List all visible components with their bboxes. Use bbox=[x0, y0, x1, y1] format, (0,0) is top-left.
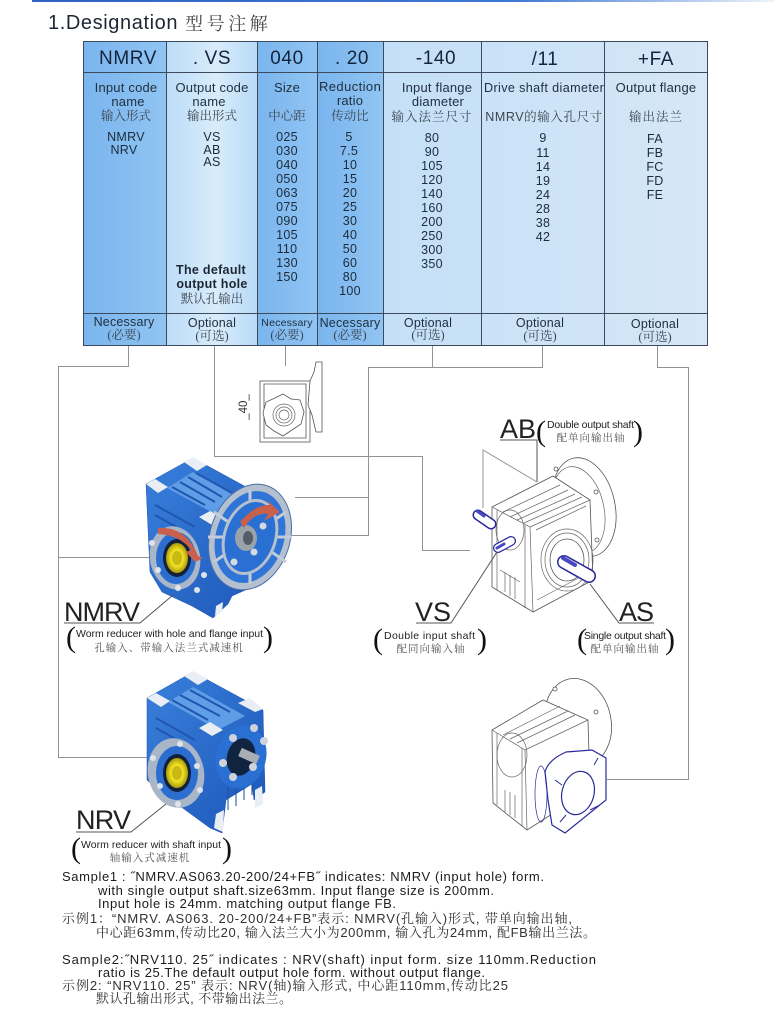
column: reduction ratio bbox=[319, 79, 381, 298]
column: size: 中心距 bbox=[268, 108, 306, 123]
sample 2 text: Sample2:˝NRV110. 25˝ indicates : NRV(shaft) input form. size 110mm.Reduction bbox=[62, 952, 596, 967]
AS label: 配单向输出轴 bbox=[590, 642, 660, 655]
header codes: +FA bbox=[638, 49, 674, 70]
column: input flange: 350 bbox=[421, 257, 443, 271]
column: drive shaft: 42 bbox=[536, 230, 550, 244]
column: output code: output hole bbox=[176, 277, 248, 291]
AB label bbox=[483, 414, 643, 508]
sample 2 text bbox=[62, 952, 596, 1006]
NMRV label: ) bbox=[263, 621, 273, 654]
column: output code: VS bbox=[203, 130, 221, 144]
header codes: NMRV bbox=[99, 48, 157, 69]
column: size: 050 bbox=[276, 172, 298, 186]
column: size: 030 bbox=[276, 144, 298, 158]
column: input flange bbox=[391, 80, 473, 271]
column: input flange: 250 bbox=[421, 229, 443, 243]
column: size: 130 bbox=[276, 256, 298, 270]
column: drive shaft: NMRV的输入孔尺寸 bbox=[485, 109, 603, 124]
column: output code: The default bbox=[176, 263, 247, 277]
column: output flange: FB bbox=[647, 146, 663, 160]
column: input flange: 200 bbox=[421, 215, 443, 229]
column: reduction ratio: 60 bbox=[343, 256, 357, 270]
column: size: 075 bbox=[276, 200, 298, 214]
AS label: ) bbox=[665, 623, 675, 656]
column: reduction ratio: 10 bbox=[343, 158, 357, 172]
red arrow left bbox=[158, 528, 203, 562]
title bbox=[48, 12, 271, 34]
AB label: ( bbox=[536, 415, 546, 448]
column: input code bbox=[95, 80, 157, 157]
column: output flange: Output flange bbox=[616, 80, 696, 95]
column: output flange bbox=[616, 80, 696, 202]
column: input flange: 120 bbox=[421, 173, 443, 187]
VS label bbox=[373, 552, 497, 656]
footer row: Optional bbox=[404, 316, 452, 330]
column: drive shaft: 38 bbox=[536, 216, 550, 230]
output flange FA bbox=[545, 750, 606, 833]
AS label: Single output shaft bbox=[584, 630, 666, 642]
column: output code: AS bbox=[203, 155, 221, 169]
column: input code: 输入形式 bbox=[101, 108, 151, 123]
column: drive shaft: 24 bbox=[536, 188, 550, 202]
mounting pads bbox=[147, 671, 263, 832]
NRV blue gearbox bbox=[141, 671, 273, 833]
NRV label: ) bbox=[222, 832, 232, 865]
footer row: (可选) bbox=[523, 328, 557, 343]
column: reduction ratio: 80 bbox=[343, 270, 357, 284]
column: output code: 默认孔输出 bbox=[181, 291, 243, 306]
footer row: (可选) bbox=[411, 327, 445, 342]
sample 1 text: 中心距63mm,传动比20, 输入法兰大小为200mm, 输入孔为24mm, 配FB输出兰法。 bbox=[96, 925, 596, 940]
header codes: 040 bbox=[270, 48, 304, 69]
column: input flange: 160 bbox=[421, 201, 443, 215]
column: drive shaft bbox=[484, 81, 604, 244]
AS label: ( bbox=[577, 623, 587, 656]
connector lines bbox=[58, 346, 688, 780]
column: input code: name bbox=[111, 94, 145, 109]
title: 1.Designation bbox=[48, 12, 178, 34]
NRV label bbox=[71, 804, 232, 865]
AS label bbox=[577, 584, 675, 656]
column: output code: 输出形式 bbox=[187, 108, 237, 123]
column: reduction ratio: 40 bbox=[343, 228, 357, 242]
AB label: ) bbox=[633, 415, 643, 448]
sample 1 text: Sample1 : ˝NMRV.AS063.20-200/24+FB˝ indicates: NMRV (input hole) form. bbox=[62, 869, 544, 884]
column: size: 025 bbox=[276, 130, 298, 144]
footer row: Optional bbox=[631, 317, 679, 331]
VS label: ) bbox=[477, 623, 487, 656]
VS label: VS bbox=[415, 597, 451, 627]
column: reduction ratio: ratio bbox=[337, 93, 363, 108]
AB label: Double output shaft bbox=[547, 419, 634, 431]
output shaft face bbox=[209, 720, 273, 794]
column: input code: NRV bbox=[110, 143, 138, 157]
footer row: (必要) bbox=[270, 328, 304, 342]
NMRV label: Worm reducer with hole and flange input bbox=[76, 628, 263, 640]
footer row: Optional bbox=[516, 316, 564, 330]
footer row: Optional bbox=[188, 316, 236, 330]
NRV label: Worm reducer with shaft input bbox=[81, 839, 221, 851]
sample 1 text: with single output shaft.size63mm. Input flange size is 200mm. bbox=[97, 883, 494, 898]
column: size bbox=[268, 80, 306, 284]
footer row: (必要) bbox=[333, 328, 367, 342]
red arrow right bbox=[240, 500, 280, 528]
column: output flange: 输出法兰 bbox=[629, 109, 683, 124]
output flange line-art gearbox bbox=[492, 672, 619, 833]
column: reduction ratio: 50 bbox=[343, 242, 357, 256]
column: input flange: 140 bbox=[421, 187, 443, 201]
input face bbox=[144, 522, 206, 594]
footer row: (可选) bbox=[195, 328, 229, 343]
footer row bbox=[94, 315, 679, 344]
sample 1 text: Input hole is 24mm. matching output flange FB. bbox=[98, 896, 396, 911]
AS label: AS bbox=[619, 597, 654, 627]
column: reduction ratio: 5 bbox=[345, 130, 353, 144]
header codes: . 20 bbox=[335, 48, 369, 69]
column: output code: name bbox=[192, 94, 226, 109]
header codes: -140 bbox=[416, 48, 456, 69]
column: size: 090 bbox=[276, 214, 298, 228]
NRV label: 轴输入式减速机 bbox=[110, 851, 190, 864]
column: reduction ratio: 100 bbox=[339, 284, 361, 298]
AB label: AB bbox=[500, 414, 536, 444]
size 40 outline drawing bbox=[238, 362, 322, 442]
title: 型号注解 bbox=[185, 14, 271, 34]
column: reduction ratio: 30 bbox=[343, 214, 357, 228]
column: drive shaft: 28 bbox=[536, 202, 550, 216]
VS input shaft bbox=[498, 541, 511, 548]
column: drive shaft: 11 bbox=[536, 146, 550, 160]
column: size: 150 bbox=[276, 270, 298, 284]
mounting pads bbox=[146, 457, 250, 616]
column: drive shaft: Drive shaft diameter bbox=[484, 81, 604, 95]
column: input code: Input code bbox=[95, 80, 157, 95]
sample 1 text: 示例1：“NMRV. AS063. 20-200/24+FB”表示: NMRV(孔输入)形式, 带单向输出轴, bbox=[62, 911, 572, 926]
designation table bbox=[83, 41, 708, 346]
column: input flange: 90 bbox=[425, 145, 439, 159]
VS label: Double input shaft bbox=[384, 630, 475, 642]
column: input flange: 300 bbox=[421, 243, 443, 257]
NMRV label bbox=[64, 595, 273, 654]
VS label: ( bbox=[373, 623, 383, 656]
sample 2 text: ratio is 25.The default output hole form. without output flange. bbox=[98, 965, 485, 980]
NRV label: NRV bbox=[76, 805, 131, 835]
size 40 outline drawing: _40_ bbox=[238, 394, 250, 421]
column: size: Size bbox=[274, 80, 300, 95]
column: size: 110 bbox=[277, 242, 297, 256]
column: reduction ratio: 15 bbox=[343, 172, 357, 186]
rear shaft bbox=[478, 515, 491, 524]
column: output flange: FA bbox=[647, 132, 663, 146]
header codes: /11 bbox=[532, 49, 558, 70]
column: output code bbox=[175, 80, 249, 306]
column: size: 040 bbox=[276, 158, 298, 172]
flange bbox=[195, 473, 305, 601]
column: output flange: FC bbox=[646, 160, 664, 174]
column: size: 063 bbox=[276, 186, 298, 200]
column: size: 105 bbox=[276, 228, 298, 242]
AB VS AS line-art gearbox bbox=[477, 452, 625, 612]
column: drive shaft: 9 bbox=[539, 131, 547, 145]
column: input flange: Input flange bbox=[402, 80, 472, 95]
column: drive shaft: 19 bbox=[536, 174, 550, 188]
column: drive shaft: 14 bbox=[536, 160, 550, 174]
sample 2 text: 默认孔输出形式, 不带输出法兰。 bbox=[96, 991, 292, 1006]
footer row: (可选) bbox=[638, 329, 672, 344]
NMRV label: NMRV bbox=[64, 597, 140, 627]
column: output code: Output code bbox=[175, 80, 249, 95]
sample 1 text bbox=[62, 869, 596, 940]
AS output shaft bbox=[564, 562, 589, 576]
column: input flange: diameter bbox=[412, 94, 465, 109]
column: output code: AB bbox=[203, 143, 221, 157]
column: output flange: FE bbox=[647, 188, 663, 202]
column: input flange: 输入法兰尺寸 bbox=[391, 109, 473, 124]
top colour strip bbox=[32, 0, 774, 2]
NMRV label: ( bbox=[66, 621, 76, 654]
column: output flange: FD bbox=[646, 174, 664, 188]
header codes bbox=[99, 48, 674, 70]
column: reduction ratio: 7.5 bbox=[340, 144, 358, 158]
sample 2 text: 示例2: “NRV110. 25” 表示: NRV(轴)输入形式, 中心距110mm,传动比25 bbox=[62, 978, 508, 993]
NRV label: ( bbox=[71, 832, 81, 865]
header codes: . VS bbox=[193, 48, 231, 69]
AB label: 配单向输出轴 bbox=[556, 431, 626, 444]
NMRV label: 孔输入、带输入法兰式减速机 bbox=[94, 641, 244, 654]
footer row: Necessary bbox=[261, 317, 313, 329]
column: input flange: 80 bbox=[425, 131, 439, 145]
column: reduction ratio: 传动比 bbox=[331, 108, 369, 123]
VS label: 配同向输入轴 bbox=[396, 642, 466, 655]
column: input flange: 105 bbox=[421, 159, 443, 173]
column: input code: NMRV bbox=[107, 130, 145, 144]
input face bbox=[141, 733, 211, 813]
column: reduction ratio: 20 bbox=[343, 186, 357, 200]
NMRV blue gearbox bbox=[144, 457, 305, 618]
column: reduction ratio: 25 bbox=[343, 200, 357, 214]
column: reduction ratio: Reduction bbox=[319, 79, 381, 94]
footer row: (必要) bbox=[107, 328, 141, 342]
footer row: Necessary bbox=[94, 315, 155, 329]
footer row: Necessary bbox=[320, 316, 381, 330]
